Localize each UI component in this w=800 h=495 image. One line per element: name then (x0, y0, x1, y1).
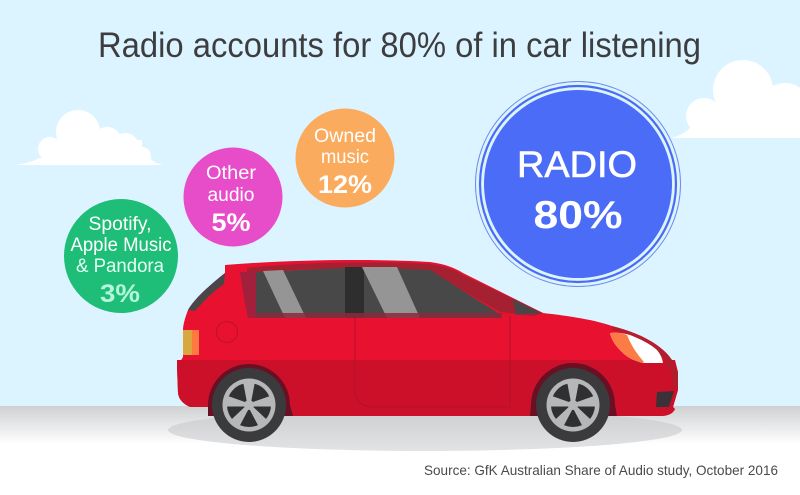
window reflections (263, 270, 306, 318)
side window front (364, 267, 502, 318)
front grille (656, 391, 674, 407)
roof shade (247, 262, 543, 316)
tail light (183, 330, 199, 355)
car (177, 260, 678, 442)
title: Radio accounts for 80% of in car listening (98, 26, 701, 65)
car body (177, 260, 678, 416)
bubble: spotify, apple music and pandora 3%: Apple Music (70, 235, 172, 256)
bubble: other audio 5%: audio (208, 184, 255, 206)
windscreen sliver (513, 299, 540, 315)
front wheel arch (530, 363, 617, 416)
cloud right (670, 60, 800, 138)
rear windscreen sliver (188, 273, 225, 311)
bubble: other audio 5%: 5% (212, 209, 250, 237)
bubble: owned music 12%: 12% (318, 171, 372, 199)
rear wheel (212, 368, 286, 442)
window trim (256, 313, 502, 318)
car shadow (168, 409, 682, 451)
rear wheel arch (208, 364, 293, 416)
lower body shade (177, 360, 678, 416)
hood edge shade (612, 326, 678, 388)
b pillar (345, 267, 364, 318)
bubble: owned music 12%: music (321, 146, 369, 168)
bubble: other audio 5% (184, 148, 282, 246)
bubble: spotify, apple music and pandora 3%: Spotify, (88, 214, 152, 235)
bubble: spotify, apple music and pandora 3% (64, 199, 178, 313)
c pillar shade (240, 272, 256, 318)
bubble: other audio 5%: Other (206, 162, 257, 184)
headlight (610, 333, 663, 363)
bubble: radio 80%: RADIO (517, 144, 637, 185)
door outline (355, 316, 510, 407)
bubble: radio 80% (476, 82, 680, 286)
bubble: owned music 12%: Owned (314, 125, 376, 147)
fuel cap (216, 322, 238, 342)
cloud left (15, 110, 163, 165)
bubble: spotify, apple music and pandora 3%: & Pandora (76, 256, 164, 277)
bubble: radio 80%: 80% (534, 194, 622, 237)
side window rear (256, 268, 345, 318)
ground (0, 406, 800, 444)
source note: Source: GfK Australian Share of Audio study, October 2016 (424, 462, 778, 478)
front wheel (536, 368, 610, 442)
bubble: owned music 12% (296, 108, 394, 208)
bubble: spotify, apple music and pandora 3%: 3% (100, 280, 140, 308)
